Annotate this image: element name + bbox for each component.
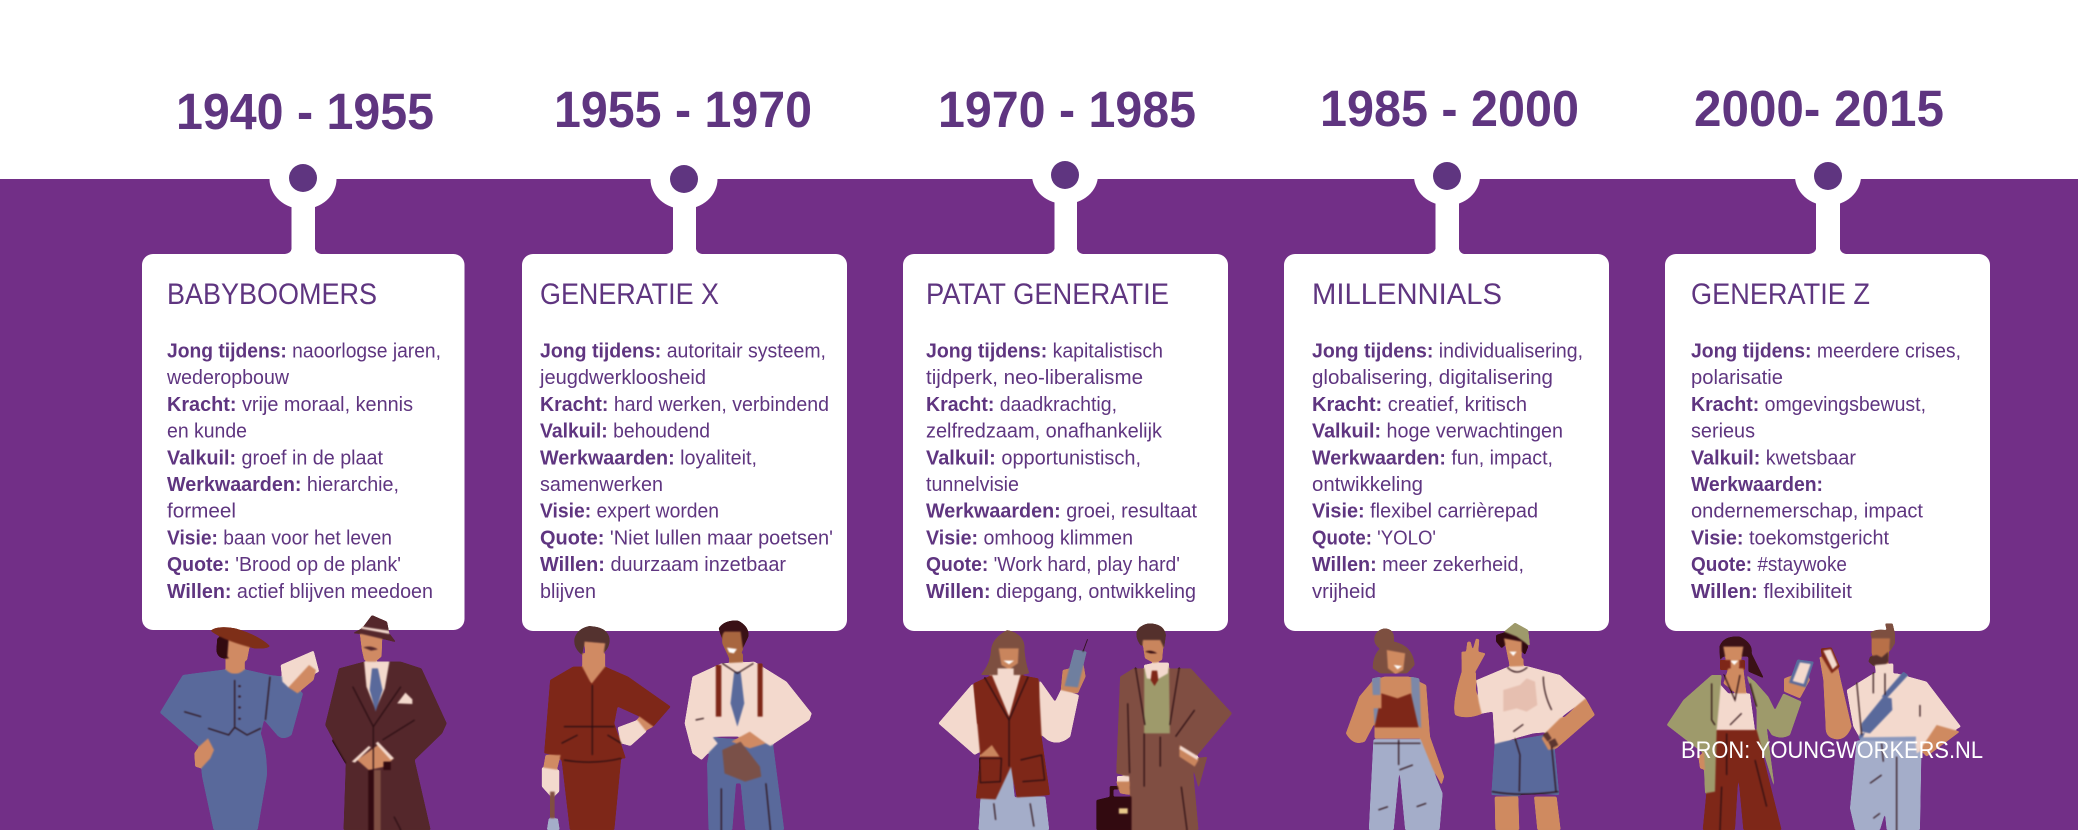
card body text: Werkwaarden: fun, impact, bbox=[1312, 447, 1553, 469]
card body text: Kracht: creatief, kritisch bbox=[1312, 394, 1527, 416]
card body text: Valkuil: behoudend bbox=[540, 421, 710, 443]
card body text: Visie: omhoog klimmen bbox=[926, 527, 1133, 549]
card body text: wederopbouw bbox=[166, 367, 290, 389]
card body text: jeugdwerkloosheid bbox=[539, 367, 706, 389]
card body text bbox=[926, 340, 1197, 603]
source credit: BRON: YOUNGWORKERS.NL bbox=[1681, 737, 1983, 764]
card body text: tunnelvisie bbox=[926, 474, 1019, 496]
card body text: ontwikkeling bbox=[1312, 474, 1423, 496]
purple background band bbox=[0, 179, 2078, 830]
card body text: Quote: #staywoke bbox=[1691, 554, 1847, 576]
card body text: Visie: toekomstgericht bbox=[1691, 527, 1889, 549]
card body text: Werkwaarden: hierarchie, bbox=[167, 474, 399, 496]
card title: GENERATIE X bbox=[540, 278, 719, 311]
card body text: Jong tijdens: naoorlogse jaren, bbox=[167, 340, 441, 362]
illustration: millennial woman with backpack bbox=[1346, 628, 1444, 830]
card body text: Quote: 'YOLO' bbox=[1312, 527, 1436, 549]
card body text: Werkwaarden: groei, resultaat bbox=[926, 501, 1197, 523]
heading: 2000- 2015: 2000- 2015 bbox=[1694, 80, 1944, 137]
illustration: generation Z woman with phone bbox=[1667, 636, 1814, 830]
card body text: Valkuil: kwetsbaar bbox=[1691, 447, 1856, 469]
card body text: Kracht: vrije moraal, kennis bbox=[167, 394, 413, 416]
card body text: Jong tijdens: individualisering, bbox=[1312, 340, 1583, 362]
card body text: Werkwaarden: loyaliteit, bbox=[540, 447, 757, 469]
connector 3 bbox=[1032, 146, 1098, 254]
card body text: ondernemerschap, impact bbox=[1691, 501, 1923, 523]
card body text: globalisering, digitalisering bbox=[1312, 367, 1553, 389]
card body text bbox=[166, 340, 441, 603]
card body text: Jong tijdens: kapitalistisch bbox=[926, 340, 1163, 362]
card body text: Willen: diepgang, ontwikkeling bbox=[926, 581, 1196, 603]
illustration: patat generation man with briefcase bbox=[1096, 623, 1232, 830]
panel: Patat generatie bbox=[903, 254, 1228, 631]
illustration: patat generation woman with mobile phone bbox=[938, 630, 1088, 830]
heading: 1970 - 1985: 1970 - 1985 bbox=[938, 81, 1196, 138]
card body text bbox=[1312, 340, 1583, 603]
card body text: Valkuil: hoge verwachtingen bbox=[1312, 421, 1563, 443]
card body text: Jong tijdens: meerdere crises, bbox=[1691, 340, 1961, 362]
card body text: blijven bbox=[540, 581, 596, 603]
card body text: Quote: 'Work hard, play hard' bbox=[926, 554, 1180, 576]
card body text: Kracht: daadkrachtig, bbox=[926, 394, 1117, 416]
card title: BABYBOOMERS bbox=[167, 278, 377, 311]
card body text: Valkuil: opportunistisch, bbox=[926, 447, 1141, 469]
card body text: Quote: 'Brood op de plank' bbox=[167, 554, 401, 576]
illustration: babyboomer woman in blue dress bbox=[160, 627, 319, 830]
card body text: Visie: flexibel carrièrepad bbox=[1312, 501, 1538, 523]
panel: Generatie X bbox=[522, 254, 847, 631]
card body text: serieus bbox=[1691, 421, 1755, 443]
connector 5 bbox=[1795, 146, 1861, 254]
card body text: zelfredzaam, onafhankelijk bbox=[926, 421, 1163, 443]
heading: 1940 - 1955: 1940 - 1955 bbox=[176, 83, 434, 140]
illustration: babyboomer man in long coat and hat bbox=[325, 615, 447, 830]
card body text: Kracht: omgevingsbewust, bbox=[1691, 394, 1926, 416]
card body text: Kracht: hard werken, verbindend bbox=[540, 394, 829, 416]
card body text: formeel bbox=[167, 501, 236, 523]
illustration: generation Z man with fanny pack bbox=[1819, 623, 1961, 830]
card body text: Jong tijdens: autoritair systeem, bbox=[540, 340, 826, 362]
card body text: vrijheid bbox=[1312, 581, 1376, 603]
card body text: Willen: actief blijven meedoen bbox=[167, 581, 433, 603]
card body text: Werkwaarden: bbox=[1691, 474, 1823, 496]
illustration: generation X man with suspenders and hat bbox=[685, 620, 812, 830]
card body text: Willen: meer zekerheid, bbox=[1312, 554, 1524, 576]
card title: GENERATIE Z bbox=[1691, 278, 1870, 311]
card title: PATAT GENERATIE bbox=[926, 278, 1169, 311]
panel: Millennials bbox=[1284, 254, 1609, 631]
heading: 1955 - 1970: 1955 - 1970 bbox=[554, 81, 812, 138]
panel: Babyboomers bbox=[142, 254, 464, 630]
illustration: generation X woman in rust suit bbox=[542, 626, 671, 830]
panel: Generatie Z bbox=[1665, 254, 1990, 631]
card body text: Willen: duurzaam inzetbaar bbox=[540, 554, 786, 576]
card body text: en kunde bbox=[167, 421, 247, 443]
card body text: polarisatie bbox=[1691, 367, 1783, 389]
card body text bbox=[1691, 340, 1961, 603]
card body text bbox=[539, 340, 833, 603]
card body text: samenwerken bbox=[540, 474, 663, 496]
connector 2 bbox=[650, 149, 718, 254]
card body text: Visie: baan voor het leven bbox=[167, 527, 392, 549]
card body text: tijdperk, neo-liberalisme bbox=[926, 367, 1143, 389]
connector 4 bbox=[1414, 146, 1480, 254]
card title: MILLENNIALS bbox=[1312, 278, 1502, 311]
card body text: Willen: flexibiliteit bbox=[1691, 581, 1852, 603]
card body text: Quote: 'Niet lullen maar poetsen' bbox=[540, 527, 833, 549]
illustration: millennial man with peace sign and beanie bbox=[1454, 623, 1595, 830]
connector 1 bbox=[270, 149, 336, 254]
heading: 1985 - 2000: 1985 - 2000 bbox=[1320, 80, 1579, 137]
card body text: Visie: expert worden bbox=[540, 501, 719, 523]
card body text: Valkuil: groef in de plaat bbox=[167, 447, 383, 469]
